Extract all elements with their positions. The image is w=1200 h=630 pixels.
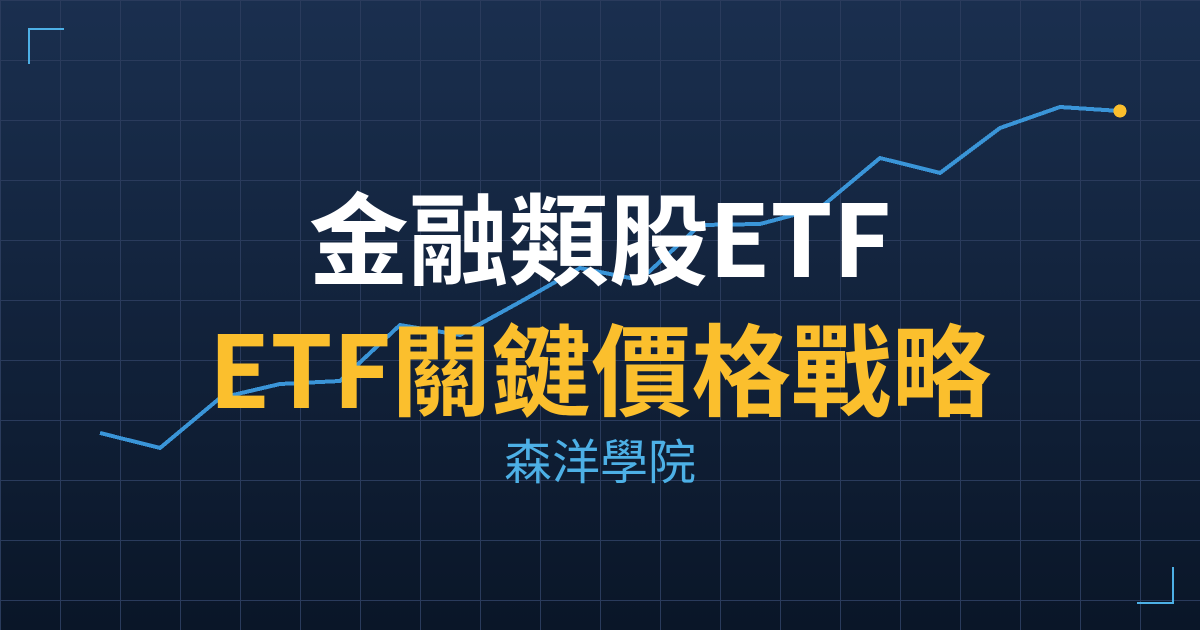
line chart: rising price: [100, 107, 1120, 448]
title line 2: ETF關鍵價格戰略: [209, 292, 991, 437]
brand name: 森洋學院: [504, 423, 696, 493]
title line 1: 金融類股ETF: [309, 161, 891, 306]
chart end point marker: [1114, 104, 1126, 118]
corner bracket: bottom right: [1137, 567, 1173, 603]
corner bracket: top left: [29, 29, 64, 64]
